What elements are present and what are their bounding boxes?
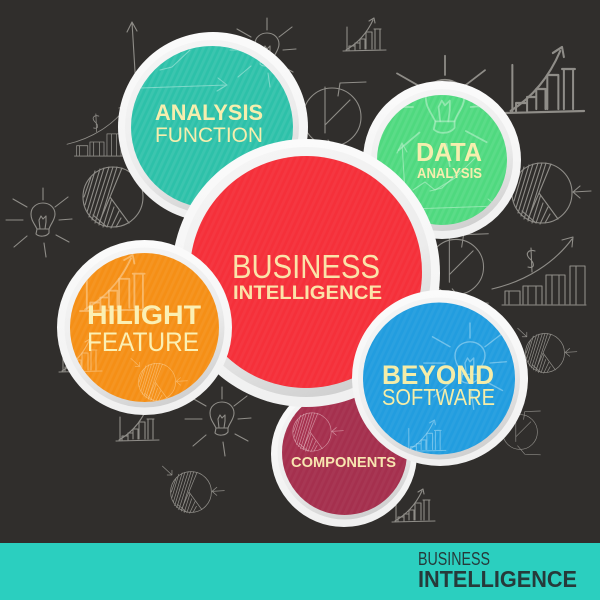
label: data analysis: ANALYSIS bbox=[417, 165, 482, 182]
footer title: INTELLIGENCE bbox=[418, 566, 577, 592]
doodle: dollar chart right bbox=[492, 237, 586, 305]
circle: data analysis bbox=[363, 81, 521, 239]
label: hilight feature: HILIGHT bbox=[87, 300, 202, 330]
label: analysis function: ANALYSIS bbox=[155, 100, 263, 125]
circle: hilight feature bbox=[57, 240, 232, 415]
doodle: chart under hilight circle bbox=[116, 408, 159, 441]
doodle: chart left of hilight circle bbox=[59, 339, 102, 372]
doodle: small chart top bbox=[343, 18, 386, 51]
label: data analysis: DATA bbox=[416, 137, 482, 167]
circle: beyond software bbox=[352, 290, 528, 466]
doodle: bulb below hilight circle bbox=[185, 387, 251, 456]
doodle: large chart top right bbox=[505, 47, 584, 113]
doodle: chart lower right bbox=[392, 489, 435, 522]
doodle: pie lower bbox=[162, 466, 224, 513]
doodle: pie left bbox=[83, 167, 143, 228]
footer band bbox=[0, 543, 600, 600]
doodle: outlined pie center top bbox=[303, 82, 366, 155]
label: hilight feature bbox=[87, 300, 202, 357]
label: business intelligence: INTELLIGENCE bbox=[233, 283, 382, 304]
doodle: line chart behind analysis circle bbox=[127, 22, 227, 91]
label: analysis function bbox=[155, 100, 263, 147]
circle: analysis function bbox=[118, 18, 308, 222]
doodle: bulb left bbox=[6, 188, 72, 257]
doodle: bulb above data circle bbox=[386, 56, 491, 166]
label: business intelligence: BUSINESS bbox=[232, 248, 380, 285]
label: analysis function: FUNCTION bbox=[155, 124, 263, 147]
label: beyond software: BEYOND bbox=[382, 360, 494, 390]
circle: components bbox=[271, 398, 416, 527]
doodle: outlined pie lower right bbox=[503, 411, 540, 455]
circle: business intelligence bbox=[172, 139, 440, 407]
label: components: COMPONENTS bbox=[291, 454, 396, 471]
doodle: pie lower right bbox=[518, 328, 577, 373]
label: beyond software bbox=[382, 360, 495, 410]
doodle inside components bbox=[292, 412, 344, 452]
doodle inside hilight bbox=[77, 254, 188, 401]
doodle inside analysis bbox=[141, 50, 270, 92]
footer title bbox=[418, 549, 577, 592]
label: hilight feature: FEATURE bbox=[87, 327, 199, 357]
label: data analysis bbox=[416, 137, 482, 182]
doodle: bulb top bbox=[230, 18, 296, 87]
doodle: pie right bbox=[500, 155, 591, 224]
label: business intelligence bbox=[232, 248, 382, 304]
label: beyond software: SOFTWARE bbox=[382, 384, 495, 410]
doodle inside data bbox=[396, 97, 492, 209]
doodle inside beyond bbox=[405, 323, 506, 451]
doodle: dollar chart left bbox=[67, 106, 137, 156]
footer title: BUSINESS bbox=[418, 549, 490, 569]
doodle: outlined pie center right bbox=[428, 234, 488, 303]
